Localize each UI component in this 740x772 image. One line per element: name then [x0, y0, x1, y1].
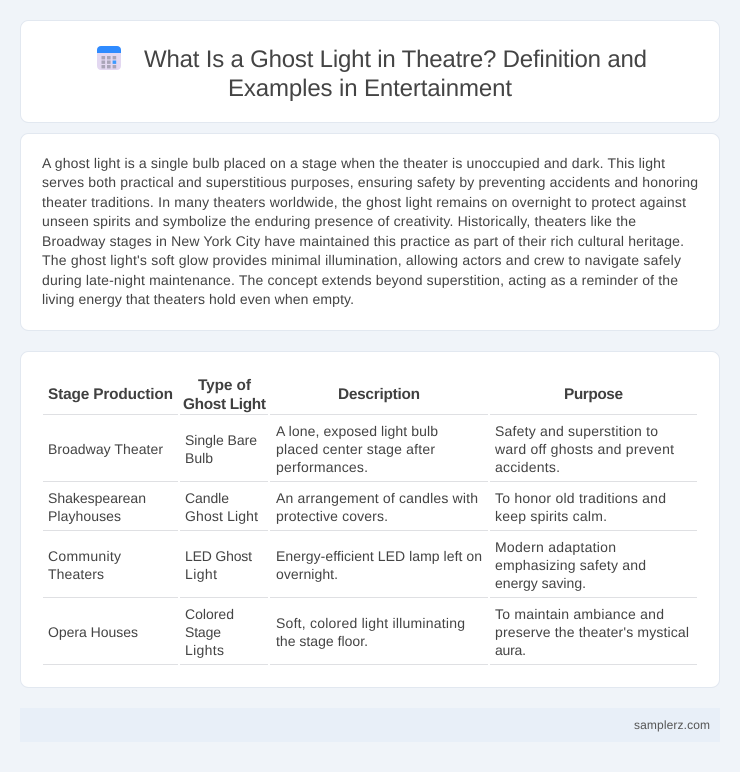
table row: Broadway Theater: placed center stage after [276, 441, 435, 457]
table row: Broadway Theater: Bulb [185, 450, 213, 466]
footer bar [20, 708, 720, 742]
table row: Community Theaters: Energy-efficient LED lamp left on [276, 548, 482, 564]
table header: Description [338, 386, 420, 403]
table row: Opera Houses: preserve the theater's mystical [495, 624, 689, 640]
table row: Community Theaters: Light [185, 566, 217, 582]
text block: definition paragraph: during late-night maintenance. The concept extends beyond superstition, acting as a reminder of the [42, 272, 678, 288]
table row: Shakespearean Playhouses: An arrangement of candles with [276, 490, 478, 506]
table header: Purpose [564, 386, 623, 403]
text block: definition paragraph: serves both practical and superstitious purposes, ensuring safety by preventing accidents and honoring [42, 174, 698, 190]
table row: Broadway Theater: Single Bare [185, 432, 257, 448]
panel: title card [20, 20, 720, 122]
table row: Broadway Theater: accidents. [495, 459, 560, 475]
footer credit: samplerz.com [634, 718, 710, 732]
table row: Community Theaters: Modern adaptation [495, 539, 616, 555]
title: What Is a Ghost Light in Theatre? Definition and [144, 46, 647, 73]
table row: Opera Houses: Colored [185, 606, 234, 622]
text block: definition paragraph: The ghost light's soft glow provides minimal illumination, allowing actors and crew to navigate safely [42, 252, 681, 268]
table row: Shakespearean Playhouses: Playhouses [48, 508, 121, 524]
table row: Community Theaters: LED Ghost [185, 548, 252, 564]
table row: Opera Houses: aura. [495, 642, 526, 658]
table row: Opera Houses: Soft, colored light illuminating [276, 615, 465, 631]
text block: definition paragraph: theater traditions. In many theaters worldwide, the ghost light remains on overnight to protect against [42, 194, 686, 210]
table row: Broadway Theater: Safety and superstition to [495, 423, 658, 439]
table header [48, 377, 623, 413]
table header: Stage Production [48, 386, 173, 403]
table row: Opera Houses: To maintain ambiance and [495, 606, 664, 622]
table row: Shakespearean Playhouses: Ghost Light [185, 508, 258, 524]
table row: Opera Houses: the stage floor. [276, 633, 368, 649]
table row: Community Theaters: overnight. [276, 566, 338, 582]
table row: Broadway Theater: ward off ghosts and prevent [494, 441, 674, 457]
panel: definition text [20, 134, 720, 330]
table row: Community Theaters: emphasizing safety and [495, 557, 646, 573]
table row: Community Theaters: Theaters [48, 566, 104, 582]
table row: Opera Houses: Opera Houses [48, 624, 138, 640]
table row: Community Theaters: Community [48, 548, 121, 564]
table header: Ghost Light [183, 396, 266, 413]
text block: definition paragraph: Broadway stages in New York City have maintained this practice as part of their rich cultural heritage. [42, 233, 684, 249]
table row: Community Theaters: energy saving. [495, 575, 586, 591]
icon: calendar [97, 46, 121, 70]
table header: Type of [198, 377, 252, 394]
table row: Community Theaters [48, 539, 646, 591]
table row: Opera Houses: Lights [185, 642, 224, 658]
title [144, 46, 647, 102]
table row: Shakespearean Playhouses: Shakespearean [48, 490, 146, 506]
title: Examples in Entertainment [228, 75, 512, 102]
table row: Broadway Theater: A lone, exposed light bulb [276, 423, 438, 439]
table row: Broadway Theater [48, 423, 674, 475]
table row: Shakespearean Playhouses: protective covers. [276, 508, 388, 524]
table row: Broadway Theater: Broadway Theater [48, 441, 163, 457]
text block: definition paragraph: unseen spirits and symbolize the enduring presence of creativity. Historically, theaters like the [42, 213, 636, 229]
table row: Opera Houses: Stage [185, 624, 221, 640]
table row: Shakespearean Playhouses [48, 490, 666, 524]
panel: ghost light table [20, 352, 720, 688]
table row: Shakespearean Playhouses: keep spirits calm. [495, 508, 607, 524]
table row: Shakespearean Playhouses: To honor old traditions and [495, 490, 666, 506]
text block: definition paragraph [42, 155, 698, 307]
text block: definition paragraph: A ghost light is a single bulb placed on a stage when the theater is unoccupied and dark. This light [42, 155, 665, 171]
table row: Broadway Theater: performances. [276, 459, 368, 475]
table row: Shakespearean Playhouses: Candle [185, 490, 229, 506]
text block: definition paragraph: living energy that theaters hold even when empty. [42, 291, 354, 307]
table row: Opera Houses [48, 606, 689, 658]
